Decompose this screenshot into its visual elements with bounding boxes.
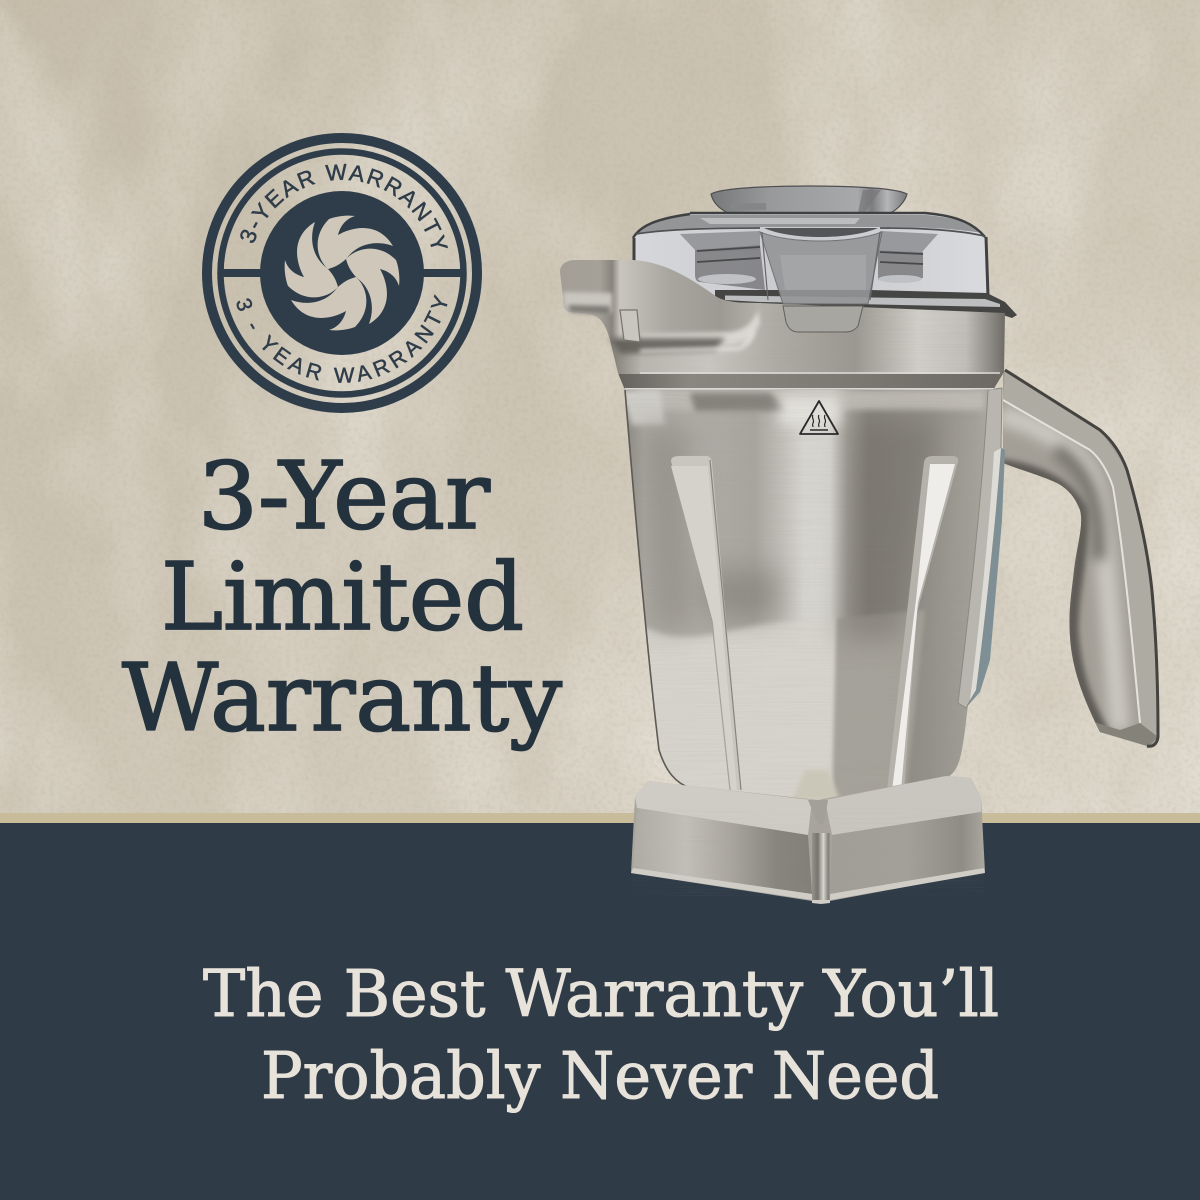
badge top arc text: 3-YEAR WARRANTY <box>240 164 448 248</box>
upper bright band <box>640 390 985 410</box>
heading line 2: Limited <box>161 543 524 651</box>
right rib <box>887 456 958 790</box>
heading line 1: 3-Year <box>198 442 491 550</box>
badge outer ring <box>207 138 477 408</box>
badge inner ring <box>220 152 464 394</box>
handle outer band <box>1003 370 1158 737</box>
icon: four-blade swirl <box>285 216 399 330</box>
tagline line 1: The Best Warranty You’ll <box>203 957 999 1032</box>
lid cap <box>711 186 907 213</box>
jar body outline <box>625 390 690 788</box>
base right bevel <box>825 776 981 835</box>
background: textured stone <box>0 0 1200 825</box>
base bottom lip <box>631 868 985 904</box>
tagline line 2: Probably Never Need <box>261 1039 939 1114</box>
jar body <box>620 385 1010 805</box>
heading line 3: Warranty <box>122 644 562 752</box>
gold divider band <box>0 813 1200 823</box>
lid left funnel <box>680 231 760 252</box>
handle <box>1003 368 1160 748</box>
handle inner shadow <box>1000 465 1104 735</box>
heading: 3-Year Limited Warranty <box>122 442 562 752</box>
badge bottom arc text: 3 - YEAR WARRANTY <box>236 294 448 383</box>
warning icon: hot surface <box>800 401 838 434</box>
brushed texture <box>620 385 1010 805</box>
jar collar <box>610 302 1005 390</box>
base left face <box>633 808 812 894</box>
base left bevel <box>635 781 812 835</box>
lid right cylinder <box>878 250 923 280</box>
spout clip <box>620 310 640 342</box>
lid top band <box>636 215 982 233</box>
lighter lower facet <box>646 622 796 797</box>
blender jar illustration <box>560 186 1165 904</box>
badge centre disc <box>260 191 424 355</box>
warranty badge <box>202 133 482 413</box>
side panel over body <box>958 388 1002 708</box>
lid dome <box>633 213 989 296</box>
left rib <box>671 456 741 790</box>
base well highlight <box>792 770 840 800</box>
tagline <box>203 957 999 1114</box>
gasket strip <box>964 447 1005 710</box>
jar base <box>631 776 985 904</box>
collar groove <box>610 374 1010 388</box>
badge divider bar <box>223 269 461 277</box>
handle tube dark core <box>1055 450 1098 560</box>
navy footer panel <box>0 823 1200 1200</box>
handle tube highlight <box>1000 415 1120 730</box>
lid rim <box>715 290 1017 318</box>
base corner post <box>812 833 830 901</box>
lid chute tab <box>760 228 882 332</box>
lid right funnel <box>878 231 938 252</box>
lid left cylinder <box>695 245 765 290</box>
base right face <box>830 812 984 894</box>
spout <box>560 260 761 354</box>
